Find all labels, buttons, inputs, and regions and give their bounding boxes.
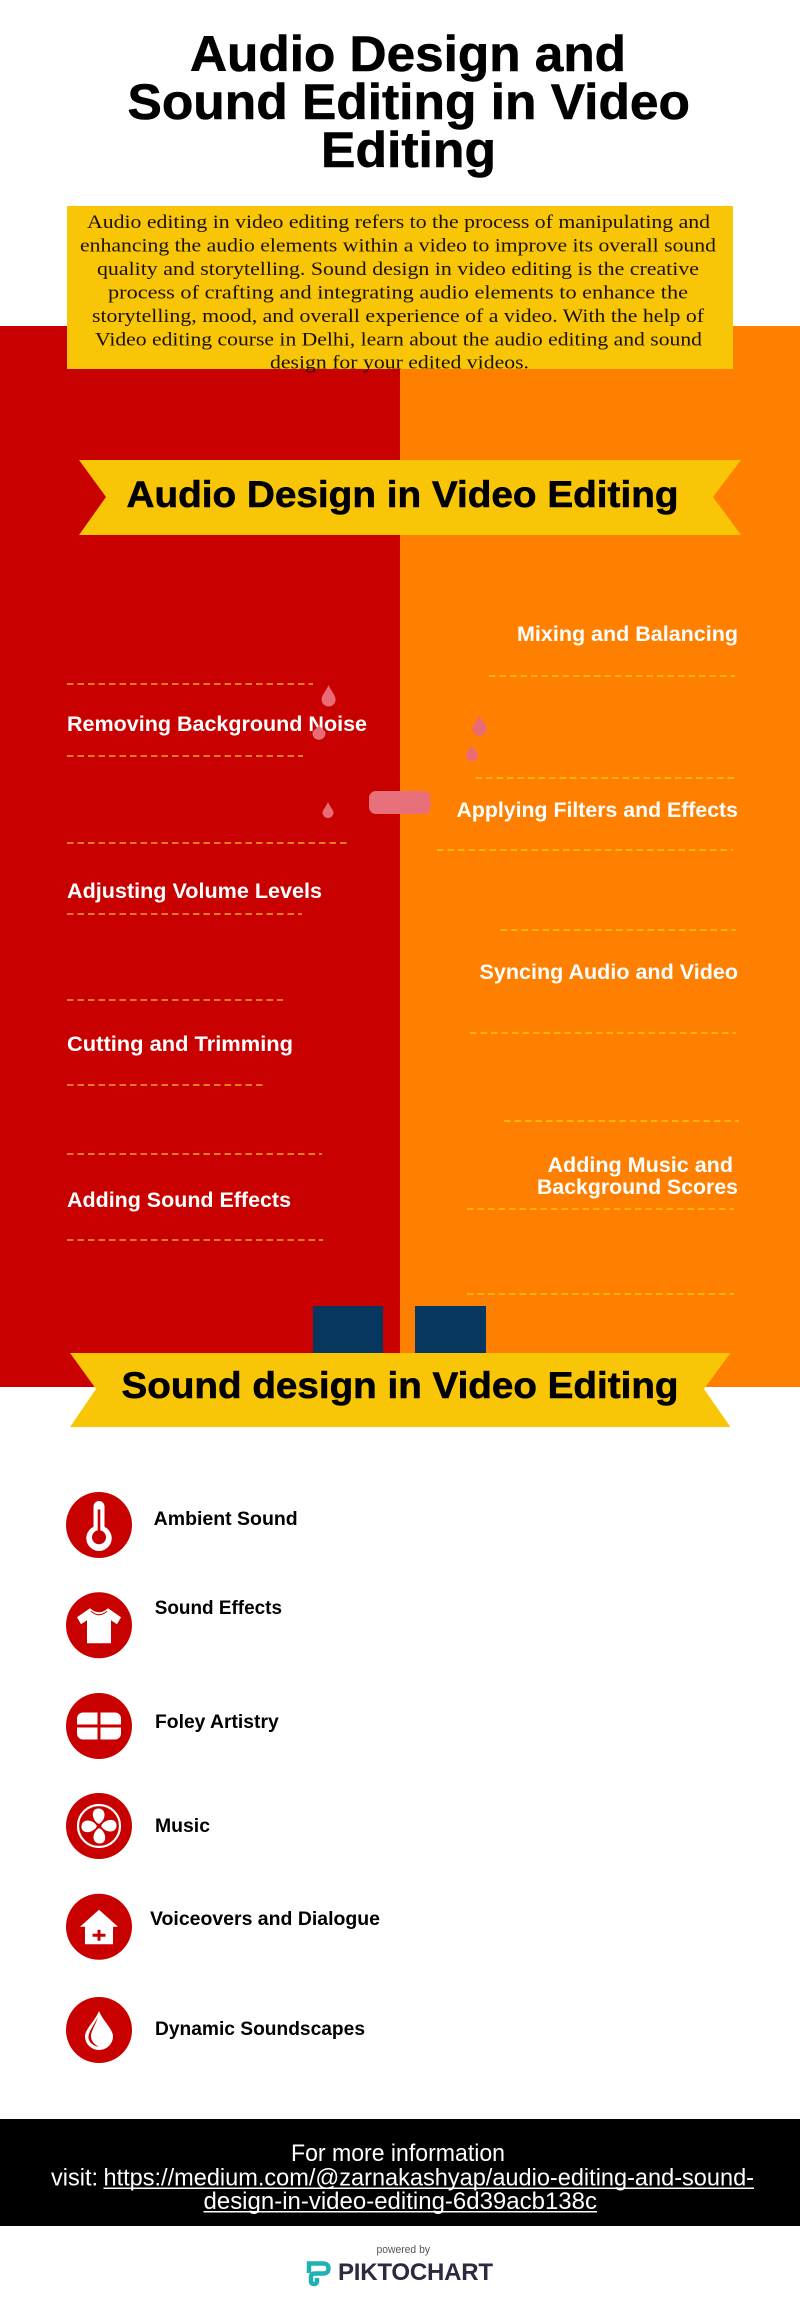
title: Sound Editing in Video bbox=[128, 74, 690, 130]
right column: audio design items bbox=[437, 623, 739, 1294]
intro text block: process of crafting and integrating audio elements to enhance the bbox=[108, 284, 688, 304]
row: Music bbox=[66, 1793, 210, 1859]
title: Audio Design and bbox=[190, 26, 626, 82]
row: Ambient Sound bbox=[66, 1492, 298, 1558]
logo: powered by Piktochart: powered by bbox=[376, 2244, 430, 2256]
title: Editing bbox=[321, 122, 496, 178]
row: Foley Artistry bbox=[66, 1693, 279, 1759]
label: Ambient Sound bbox=[154, 1509, 298, 1530]
item: Removing Background Noise: Removing Background Noise bbox=[67, 713, 367, 736]
title bbox=[128, 26, 690, 178]
logo: powered by Piktochart bbox=[309, 2244, 493, 2286]
banner: Audio Design in Video Editing: Audio Design in Video Editing bbox=[126, 474, 678, 515]
icon: thermometer bbox=[66, 1492, 132, 1558]
label: Sound Effects bbox=[155, 1598, 282, 1619]
decorative drops bbox=[312, 685, 487, 818]
icon: t-shirt bbox=[66, 1592, 132, 1658]
panel: red background bbox=[0, 326, 400, 1387]
decorative pink bar bbox=[369, 791, 430, 814]
row: Dynamic Soundscapes bbox=[66, 1997, 365, 2063]
intro text block: storytelling, mood, and overall experience of a video. With the help of bbox=[92, 307, 705, 327]
item: Mixing and Balancing: Mixing and Balancing bbox=[517, 623, 738, 646]
intro text block: enhancing the audio elements within a video to improve its overall sound bbox=[80, 236, 717, 256]
item: Adding Music and Background Scores: Background Scores bbox=[537, 1176, 738, 1199]
panel: orange background bbox=[400, 326, 800, 1387]
intro text block: quality and storytelling. Sound design in video editing is the creative bbox=[97, 260, 699, 280]
footer: more information: https://medium.com/@zarnakashyap/audio-editing-and-sound- bbox=[104, 2164, 754, 2192]
item: Syncing Audio and Video: Syncing Audio and Video bbox=[480, 961, 738, 984]
icon: house with cross bbox=[66, 1894, 132, 1960]
icon: water drop bbox=[66, 1997, 132, 2063]
label: Voiceovers and Dialogue bbox=[150, 1909, 380, 1930]
footer: more information bbox=[0, 2119, 800, 2226]
list: sound design elements bbox=[66, 1492, 380, 2063]
banner: Sound design in Video Editing: Sound design in Video Editing bbox=[122, 1365, 678, 1406]
icon: piktochart mark bbox=[309, 2264, 328, 2284]
label: Dynamic Soundscapes bbox=[155, 2019, 365, 2040]
banner: Sound design in Video Editing bbox=[70, 1353, 730, 1427]
intro text block bbox=[67, 206, 733, 374]
item: Adding Music and Background Scores bbox=[467, 1121, 739, 1294]
left column: audio design items bbox=[67, 684, 367, 1240]
item: Cutting and Trimming: Cutting and Trimming bbox=[67, 1033, 293, 1056]
banner: Audio Design in Video Editing bbox=[79, 460, 741, 535]
footer: more information: design-in-video-editing-6d39acb138c bbox=[204, 2188, 597, 2215]
item: Adding Sound Effects: Adding Sound Effects bbox=[67, 1189, 291, 1212]
row: Voiceovers and Dialogue bbox=[66, 1894, 380, 1960]
item: Adding Music and Background Scores: Adding Music and bbox=[548, 1154, 733, 1177]
label: Foley Artistry bbox=[155, 1712, 279, 1733]
footer: more information: visit: bbox=[51, 2164, 98, 2192]
footer: more information: For more information bbox=[291, 2140, 505, 2167]
icon: bandage grid bbox=[66, 1693, 132, 1759]
label: Music bbox=[155, 1816, 210, 1837]
intro text block: design for your edited videos. bbox=[270, 354, 529, 374]
logo: powered by Piktochart: PIKTOCHART bbox=[338, 2259, 493, 2286]
intro text block: Video editing course in Delhi, learn about the audio editing and sound bbox=[95, 330, 703, 350]
icon: fan bbox=[66, 1793, 132, 1859]
navy blocks bbox=[313, 1306, 486, 1354]
item: Applying Filters and Effects: Applying Filters and Effects bbox=[456, 799, 738, 822]
intro text block: Audio editing in video editing refers to the process of manipulating and bbox=[87, 213, 711, 233]
row: Sound Effects bbox=[66, 1592, 282, 1658]
item: Adjusting Volume Levels: Adjusting Volume Levels bbox=[67, 880, 322, 903]
